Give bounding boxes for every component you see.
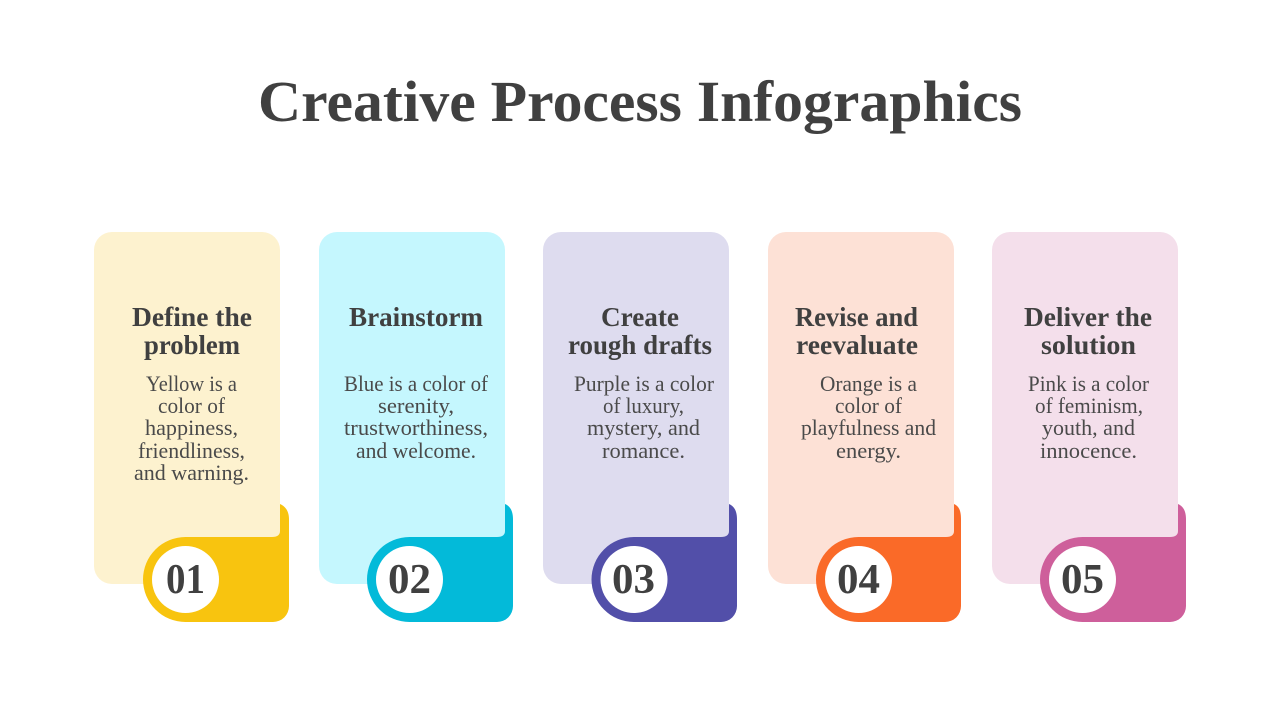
card background orange [768,232,954,584]
body text purple: romance. [602,438,685,463]
heading: revise and reevaluate: Revise and [795,302,918,332]
card background purple [543,232,729,584]
heading: revise and reevaluate [795,302,918,360]
body text purple: Purple is a color [574,371,715,396]
panel: step 2 brainstorm [319,232,513,622]
heading: brainstorm: Brainstorm [349,302,484,332]
panel: step 5 deliver the solution [992,232,1186,622]
body text pink: of feminism, [1035,393,1143,418]
body text yellow [134,371,249,485]
body text yellow: and warning. [134,460,249,485]
body text orange [801,371,936,463]
number badge 02: 02 [388,557,431,603]
number tab pink [1040,504,1186,622]
number badge 04 [825,546,892,613]
panel: step 4 revise and reevaluate [768,232,961,622]
number badge 03: 03 [612,557,655,603]
card background blue [319,232,505,584]
body text pink: Pink is a color [1028,371,1150,396]
heading: deliver the solution [1024,302,1152,360]
heading: create rough drafts: Create [601,302,679,332]
body text blue: serenity, [378,393,454,418]
number badge 01: 01 [166,557,205,603]
body text purple [574,371,715,463]
body text orange: Orange is a [820,371,917,396]
heading: deliver the solution: Deliver the [1024,302,1152,332]
body text orange: energy. [836,438,901,463]
body text blue: Blue is a color of [344,371,489,396]
heading: define the problem: Define the [132,302,252,332]
number tab purple [592,504,737,622]
heading: define the problem: problem [144,330,240,360]
number tab orange [816,504,961,622]
heading: define the problem [132,302,252,360]
body text orange: color of [835,393,903,418]
body text blue [344,371,489,463]
heading: create rough drafts [568,302,712,360]
number badge 05 [1049,546,1116,613]
number badge 02 [376,546,443,613]
body text orange: playfulness and [801,415,936,440]
body text yellow: happiness, [145,415,238,440]
card background yellow [94,232,280,584]
heading: revise and reevaluate: reevaluate [796,330,918,360]
number tab blue [367,504,513,622]
number badge 05: 05 [1061,557,1104,603]
number tab yellow [143,504,289,622]
body text blue: and welcome. [356,438,476,463]
body text purple: mystery, and [587,415,700,440]
number badge 03 [600,546,668,613]
number badge 01 [152,546,219,613]
panel: step 1 define the problem [94,232,289,622]
body text pink [1028,371,1150,463]
number badge 04: 04 [837,557,880,603]
card background pink [992,232,1178,584]
title: Creative Process Infographics [258,69,1022,134]
body text yellow: friendliness, [138,438,245,463]
panel: step 3 create rough drafts [543,232,737,622]
body text pink: youth, and [1042,415,1135,440]
body text blue: trustworthiness, [344,415,488,440]
body text pink: innocence. [1040,438,1137,463]
heading: create rough drafts: rough drafts [568,330,712,360]
body text yellow: Yellow is a [146,371,237,396]
body text yellow: color of [158,393,226,418]
body text purple: of luxury, [603,393,684,418]
heading: deliver the solution: solution [1041,330,1136,360]
